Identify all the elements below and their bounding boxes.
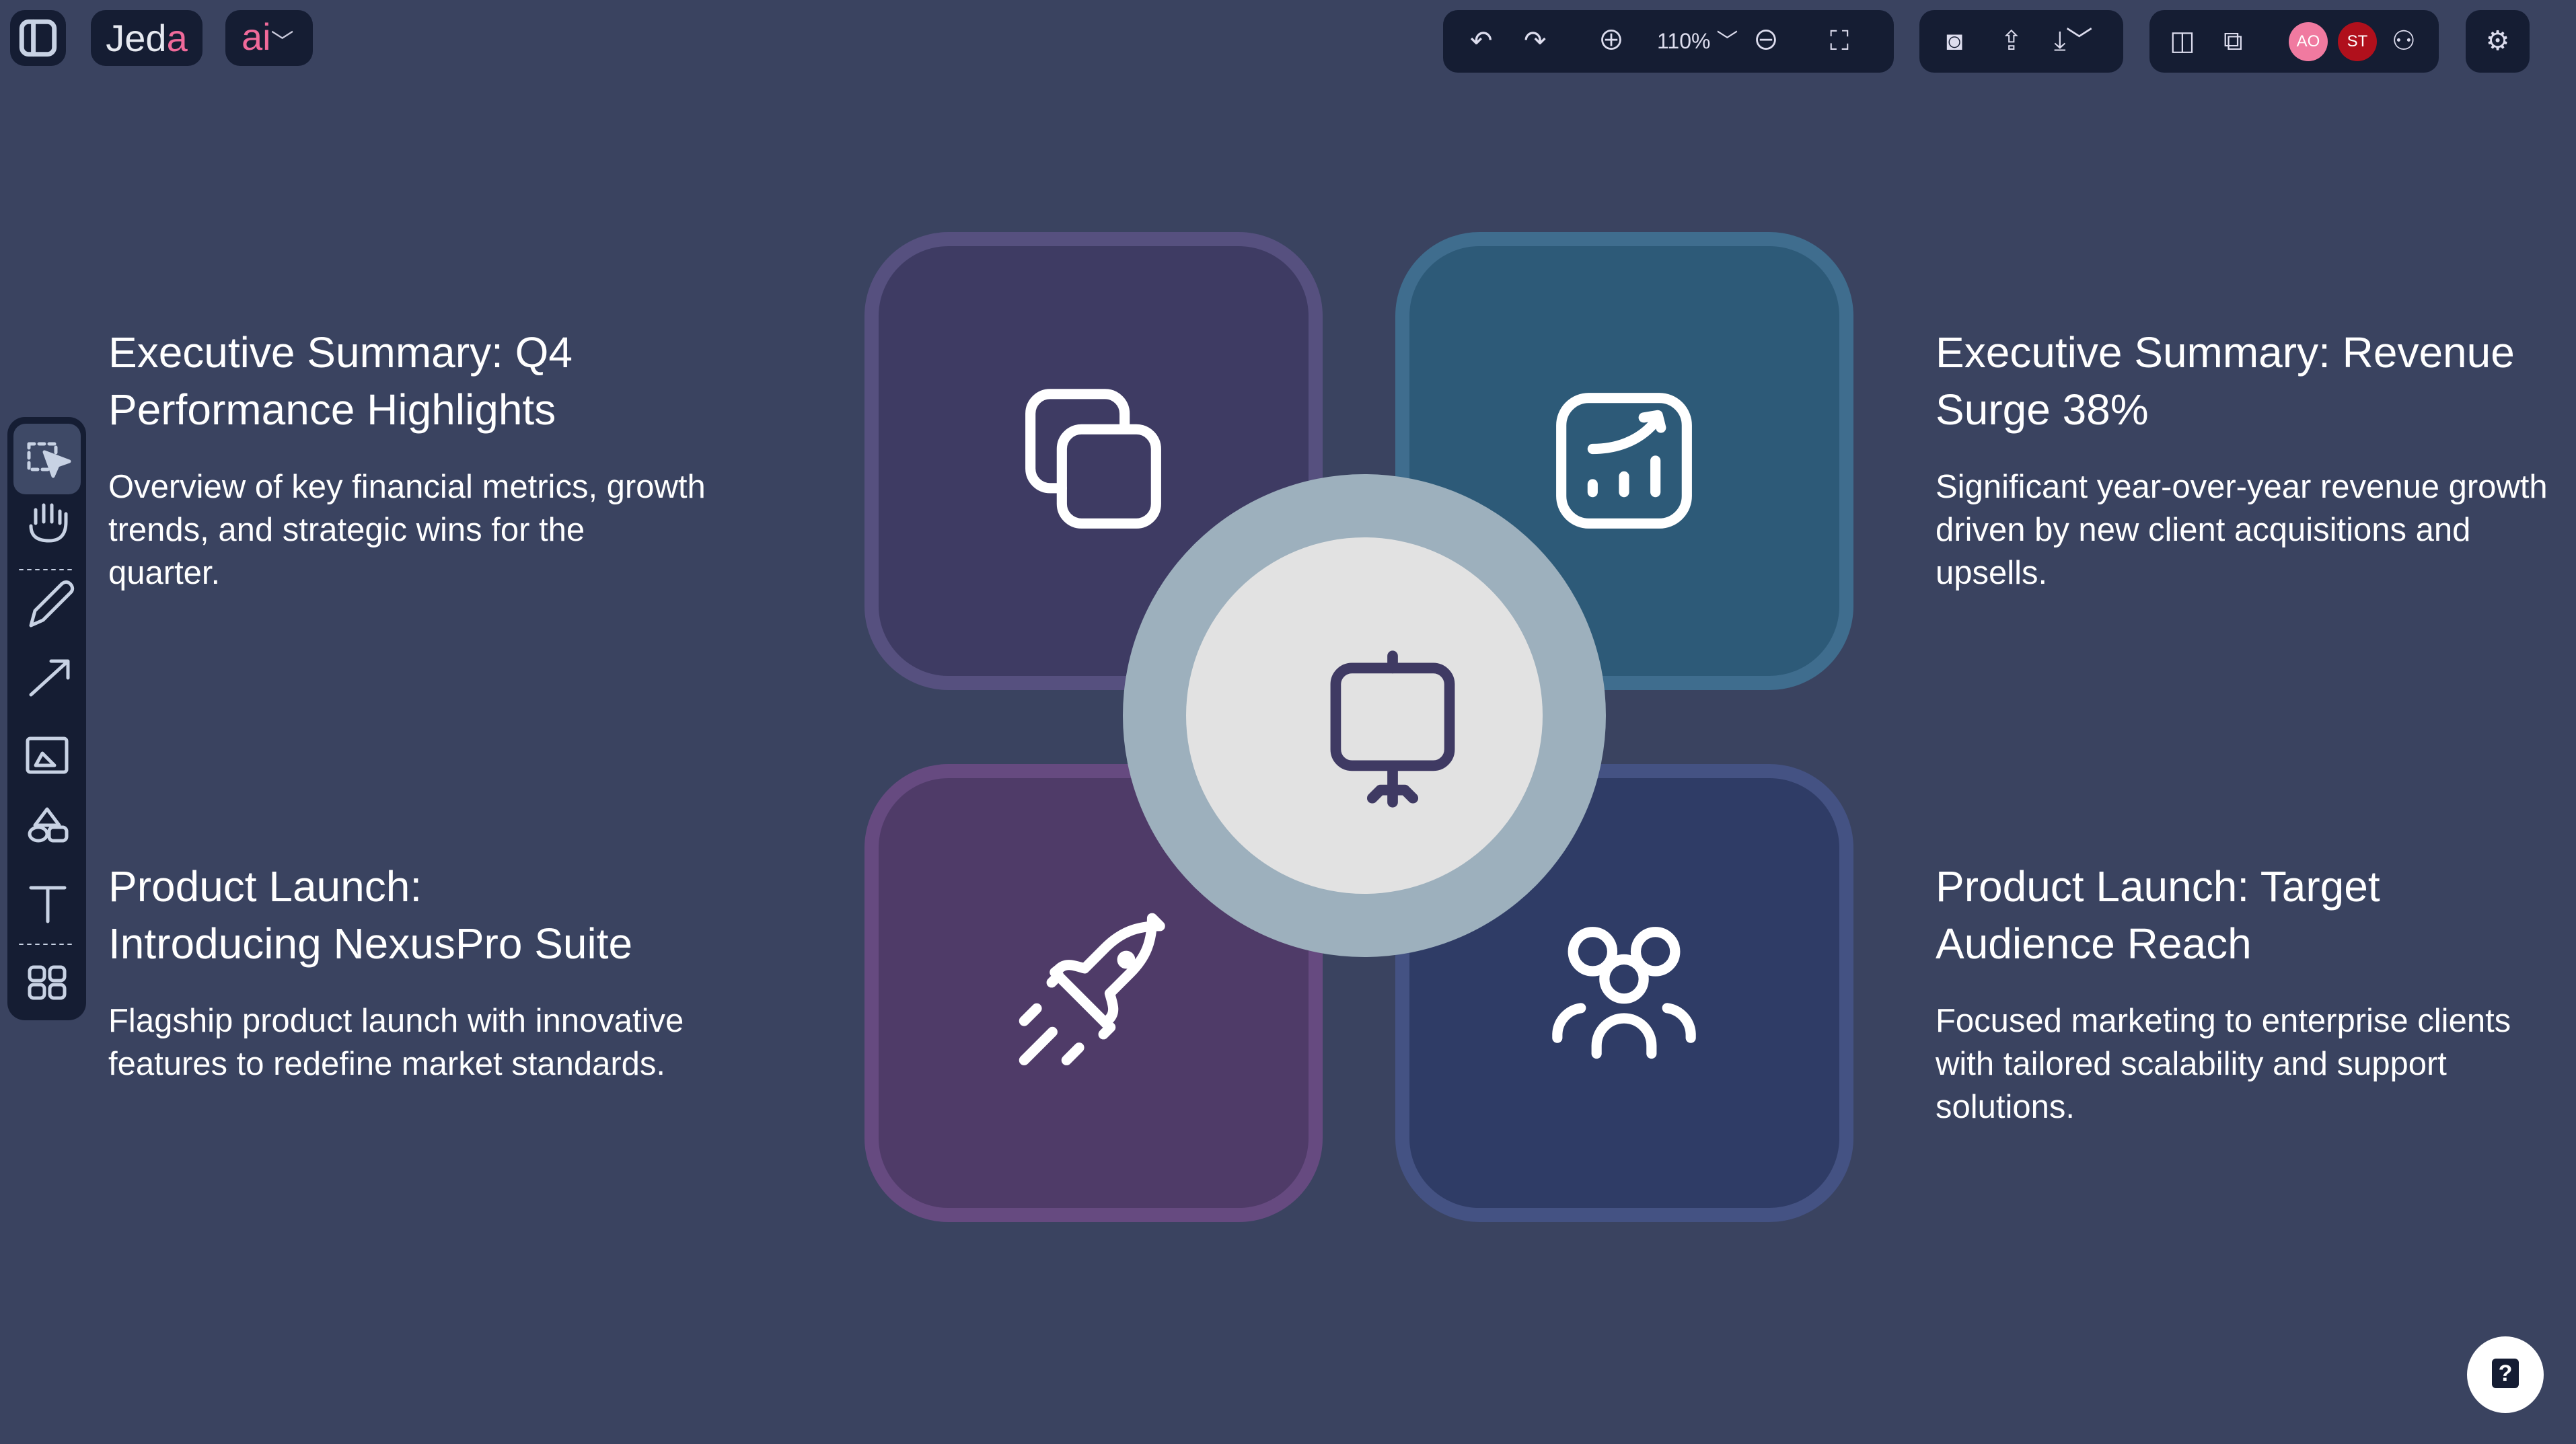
icon: growth chart (1556, 393, 1692, 529)
text block: NexusPro launch: Flagship product launch with innovative (108, 1003, 684, 1039)
collaborators group: ◫ (2170, 26, 2195, 56)
text block: target audience (1935, 862, 2511, 1125)
text block: NexusPro launch: features to redefine market standards. (108, 1046, 665, 1082)
top toolbar right (1443, 10, 2530, 73)
tile: rocket icon (bottom-left) (864, 764, 1323, 1222)
export group: ⤓﹀ (2054, 26, 2093, 56)
tile: copy icon (top-left) (864, 232, 1323, 690)
text block: revenue surge: driven by new client acquisitions and (1936, 512, 2470, 548)
center circle with presentation icon (1123, 474, 1606, 957)
sidebar toggle button (10, 10, 66, 66)
text block: target audience: Focused marketing to enterprise clients (1936, 1003, 2511, 1039)
tile: chart icon (top-right) (1395, 232, 1853, 690)
avatar ST: ST (2347, 32, 2367, 50)
text block: target audience: Audience Reach (1936, 919, 2252, 968)
help button: ? (2499, 1361, 2512, 1386)
text block: Q4 performance highlights: quarter. (108, 555, 220, 591)
help button (2467, 1336, 2544, 1413)
text block: target audience: solutions. (1936, 1089, 2075, 1125)
avatar ST (2338, 22, 2377, 61)
logo Jeda (91, 10, 203, 66)
logo Jeda: Jeda (106, 17, 188, 59)
text block: target audience: Product Launch: Target (1936, 862, 2380, 911)
icon: copy (1025, 389, 1161, 529)
top toolbar left (10, 10, 313, 66)
text block: revenue surge: upsells. (1936, 555, 2047, 591)
text block: target audience: with tailored scalability and support (1936, 1046, 2447, 1082)
text block: revenue surge: Surge 38% (1936, 385, 2149, 434)
text block: NexusPro launch: Introducing NexusPro Suite (108, 919, 632, 968)
text block: Q4 performance highlights (108, 328, 706, 591)
icon: users (1552, 927, 1696, 1059)
inner disc (1186, 537, 1543, 894)
text block: NexusPro launch: Product Launch: (108, 862, 422, 911)
settings button (2466, 10, 2530, 73)
collaborators group: ⚇ (2392, 26, 2416, 56)
ai button: ai﹀ (242, 15, 294, 58)
avatar AO (2289, 22, 2328, 61)
collaborators group (2149, 10, 2439, 73)
icon: rocket (1019, 913, 1165, 1065)
text block: revenue surge: Significant year-over-year revenue growth (1936, 469, 2548, 505)
undo/zoom group (1443, 10, 1894, 73)
selected tool highlight (13, 424, 81, 494)
undo/zoom group: ⛶ (1830, 26, 1849, 56)
text block: NexusPro launch (108, 862, 684, 1082)
left tool sidebar (7, 417, 86, 1020)
text block: revenue surge: Executive Summary: Revenue (1936, 328, 2515, 377)
icon: presentation board (1331, 650, 1455, 808)
export group: ⇪ (2000, 26, 2023, 56)
export group: ◙ (1946, 26, 1962, 56)
text block: Q4 performance highlights: trends, and strategic wins for the (108, 512, 585, 548)
text block: Q4 performance highlights: Overview of key financial metrics, growth (108, 469, 706, 505)
undo/zoom group: ↶ (1470, 26, 1493, 56)
ai button (225, 10, 313, 66)
avatar AO: AO (2297, 32, 2320, 50)
settings button: ⚙ (2486, 26, 2509, 56)
undo/zoom group: 110% ﹀ (1657, 29, 1738, 53)
undo/zoom group: ↷ (1524, 26, 1547, 56)
tile: users icon (bottom-right) (1395, 764, 1853, 1222)
text block: Q4 performance highlights: Performance Highlights (108, 385, 556, 434)
collaborators group: ⧉ (2223, 26, 2243, 56)
undo/zoom group: ⊕ (1598, 26, 1625, 56)
text block: Q4 performance highlights: Executive Summary: Q4 (108, 328, 573, 377)
export group (1919, 10, 2123, 73)
undo/zoom group: ⊖ (1753, 26, 1779, 56)
text block: revenue surge (1936, 328, 2548, 591)
